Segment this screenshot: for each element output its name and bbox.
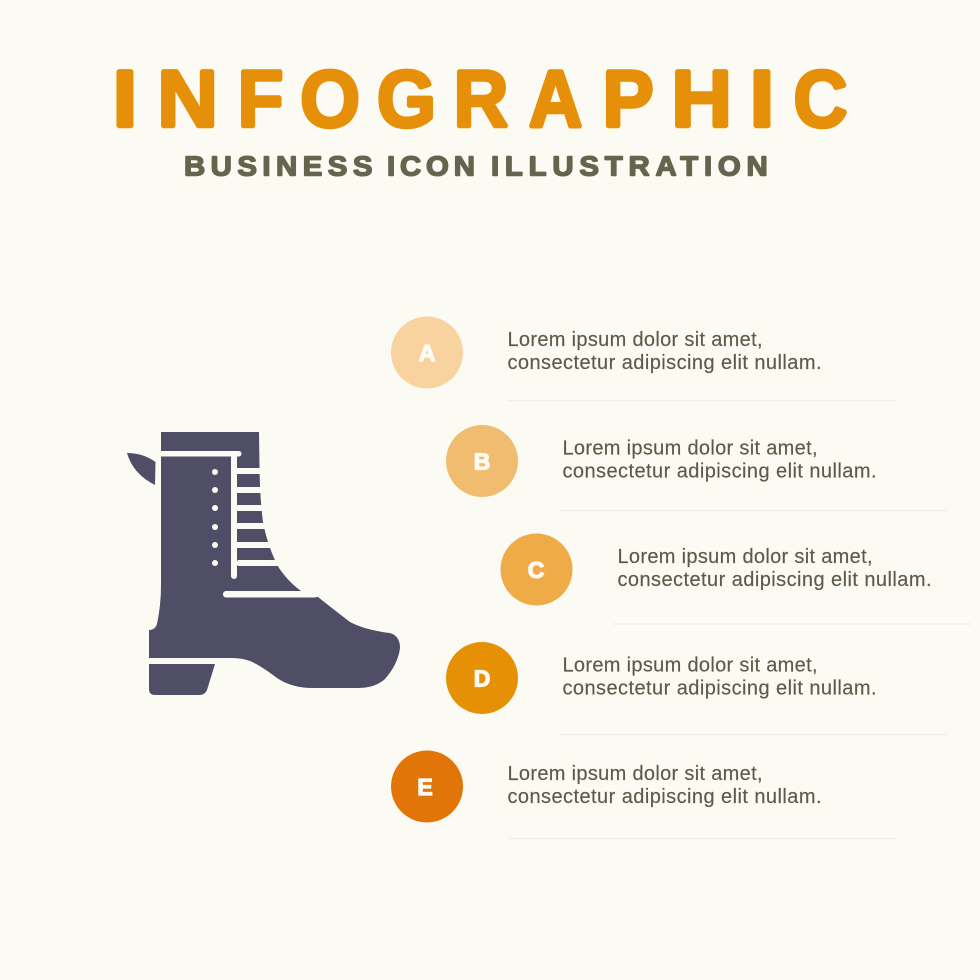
badge C (500, 534, 572, 606)
icon: boot (127, 432, 400, 695)
badge D (446, 642, 518, 714)
item D (446, 642, 949, 734)
badge A: A (419, 340, 435, 366)
title: C (794, 53, 848, 144)
title: A (529, 52, 583, 144)
text B: Lorem ipsum dolor sit amet, (562, 438, 818, 460)
subtitle: ILLUSTRATION (491, 151, 774, 182)
badge E: E (417, 774, 433, 800)
boot tab (127, 453, 156, 485)
item E (391, 750, 895, 838)
badge B: B (474, 448, 490, 474)
title: R (454, 53, 508, 144)
item A (391, 316, 895, 400)
title: O (300, 53, 360, 144)
title: G (377, 53, 436, 144)
subtitle: BUSINESS (184, 151, 378, 182)
text C: consectetur adipiscing elit nullam. (618, 569, 932, 591)
text B (562, 438, 876, 482)
subtitle: ICON (387, 151, 480, 182)
title: I (749, 54, 775, 144)
text C: Lorem ipsum dolor sit amet, (618, 546, 872, 568)
title: N (157, 53, 218, 144)
badge A (391, 316, 463, 388)
badge D: D (474, 666, 490, 692)
text B: consectetur adipiscing elit nullam. (562, 460, 876, 482)
title: P (602, 53, 654, 144)
text A: consectetur adipiscing elit nullam. (508, 352, 822, 374)
boot heel (149, 664, 215, 695)
text D: consectetur adipiscing elit nullam. (562, 678, 876, 700)
text D: Lorem ipsum dolor sit amet, (562, 654, 818, 676)
text A: Lorem ipsum dolor sit amet, (508, 329, 762, 351)
text D (562, 654, 876, 700)
boot seams and lacing (156, 451, 318, 598)
text E (508, 763, 822, 808)
title: H (671, 53, 732, 144)
item C (500, 534, 972, 624)
subtitle (184, 151, 774, 182)
title (112, 52, 848, 144)
boot upper and sole (149, 432, 400, 688)
badge E (391, 750, 463, 822)
badge C: C (528, 557, 544, 583)
item B (446, 425, 949, 510)
text A (508, 329, 822, 374)
title: I (112, 54, 138, 144)
badge B (446, 425, 518, 497)
title: F (238, 53, 284, 144)
text E: Lorem ipsum dolor sit amet, (508, 763, 762, 785)
text E: consectetur adipiscing elit nullam. (508, 786, 822, 808)
text C (618, 546, 932, 591)
